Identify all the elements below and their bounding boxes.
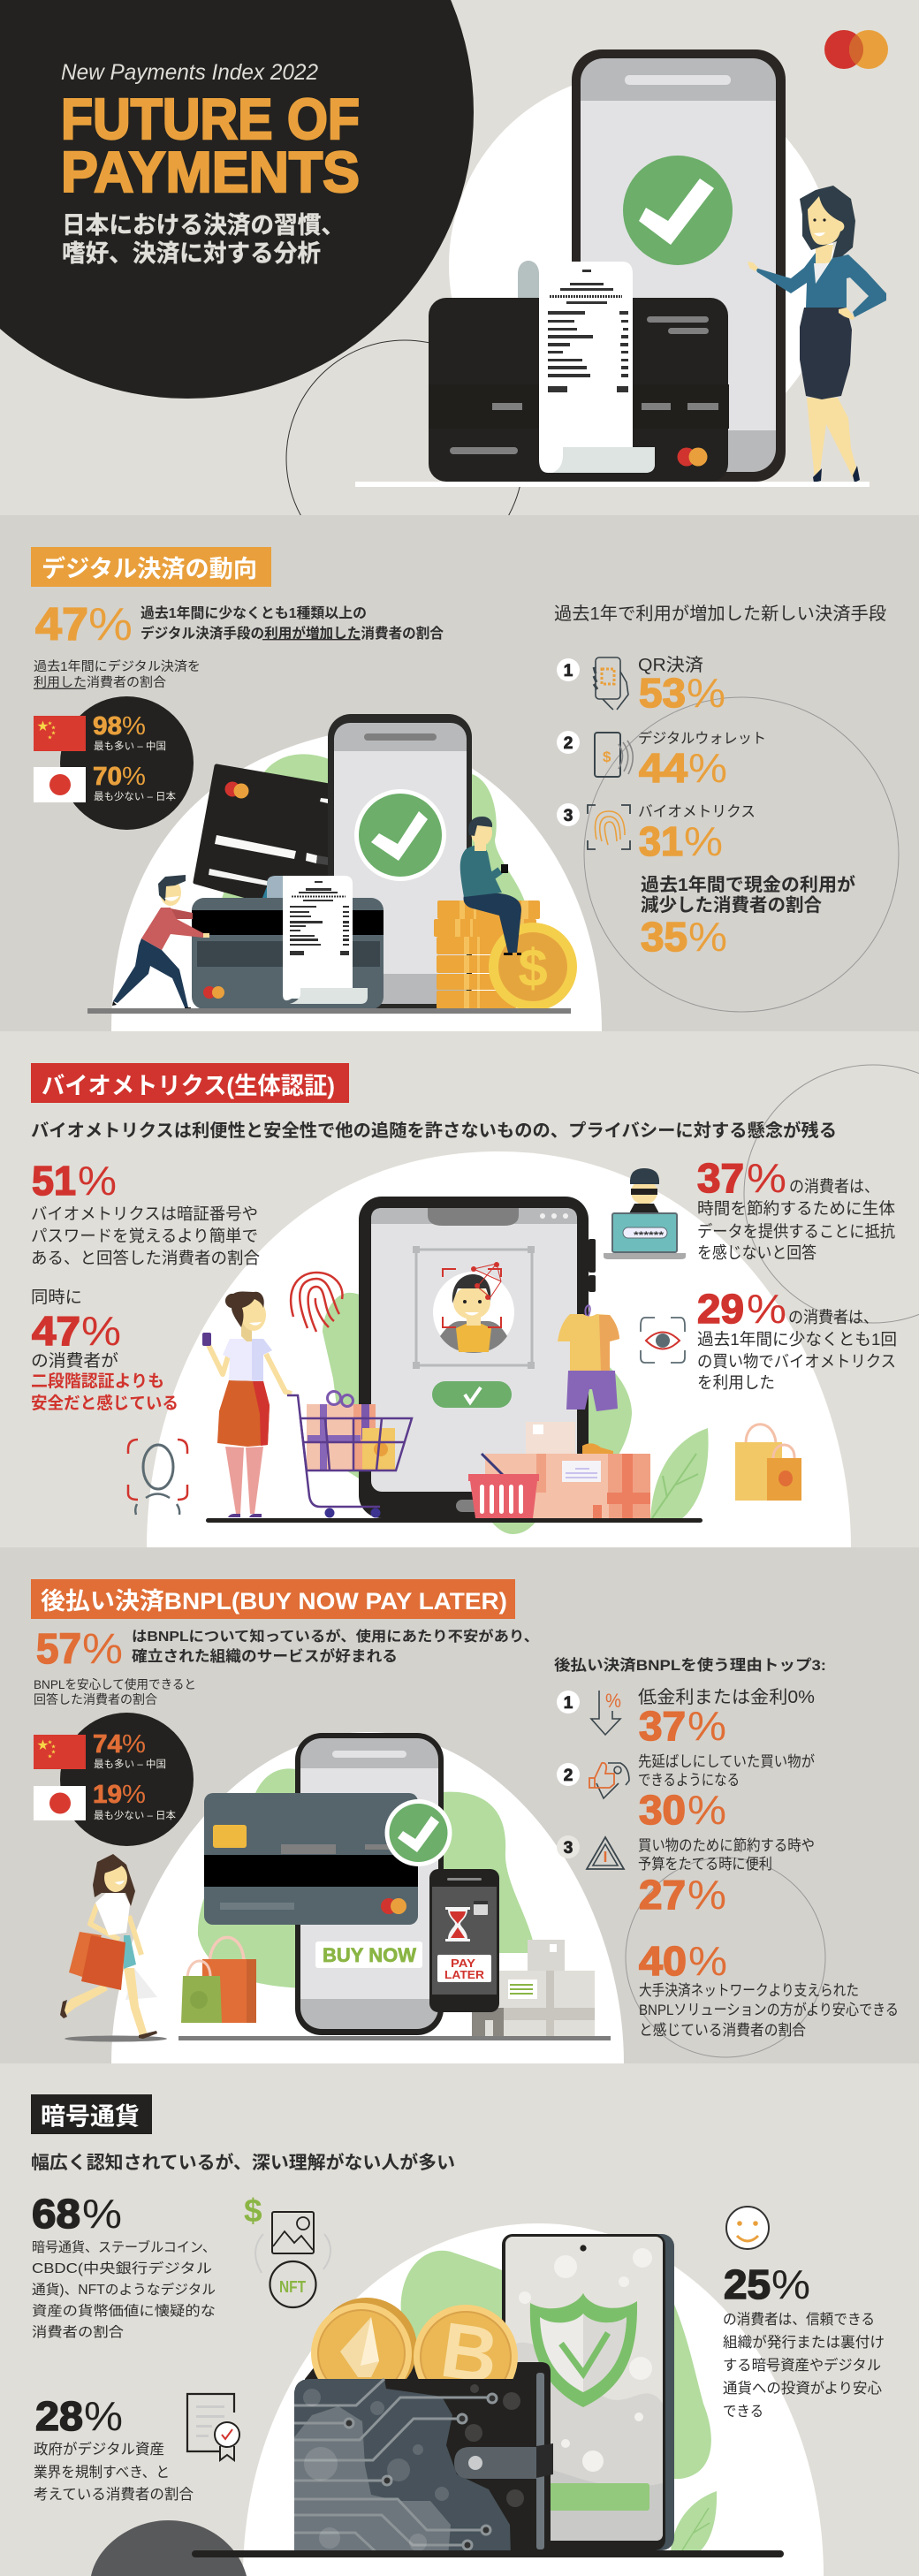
base bar [192, 2550, 784, 2557]
stat Japan 70%: 最も少ない – 日本 [94, 790, 176, 802]
base line [355, 482, 870, 487]
green blobs [221, 754, 526, 906]
stat 68% [32, 2191, 216, 2340]
crypto coins: B [436, 2306, 504, 2400]
woman walking with bags [60, 1854, 167, 2041]
icon: hourglass [445, 1907, 470, 1941]
stat China 98%: 98 [93, 712, 122, 741]
stat 57%: 57 [36, 1626, 81, 1673]
ranked item 1: QR: QR決済 [638, 655, 703, 675]
stat 37%: の消費者は、 [789, 1177, 879, 1196]
decorative ring [744, 1065, 919, 1323]
icon: fingerprint [588, 805, 630, 849]
China flag [34, 1735, 86, 1769]
stat 25%: 25 [724, 2261, 771, 2307]
China flag: ★ [37, 1738, 49, 1752]
icon: warning triangle [587, 1837, 624, 1869]
face id icon [128, 1440, 187, 1515]
stat 40%: % [688, 1938, 727, 1984]
stat 28% [34, 2393, 194, 2503]
cash decline stat: 減少した消費者の割合 [641, 894, 822, 916]
subtitle: New Payments Index 2022: New Payments Index 2022 [61, 60, 318, 85]
cash decline stat: 35 [641, 914, 687, 960]
right heading: 過去1年で利用が増加した新しい決済手段 [554, 604, 886, 624]
stat 28%: 考えている消費者の割合 [34, 2486, 194, 2503]
panel: crypto [31, 2094, 885, 2576]
China flag: ★ [48, 1754, 52, 1759]
man pushing printer [112, 875, 209, 1010]
heading label: 暗号通貨 [41, 2102, 140, 2130]
ranked item 3: biometrics [557, 803, 756, 864]
stat 47%: の消費者が [31, 1351, 118, 1371]
title: FUTURE OF PAYMENTS: PAYMENTS [61, 140, 360, 204]
panel: BNPL [31, 1579, 899, 2063]
ranked item 3: biometrics: % [684, 818, 723, 864]
reason 3: budgeting [557, 1835, 815, 1918]
stat 47%: 二段階認証よりも [31, 1372, 164, 1391]
reason 3: budgeting: 買い物のために節約する時や [638, 1837, 815, 1854]
stat 29%: の消費者は、 [788, 1308, 878, 1326]
left caption: 過去1年間にデジタル決済を [34, 658, 201, 674]
ranked item 2: wallet: 2 [564, 734, 573, 753]
phone with shield [502, 2234, 674, 2550]
subheading: バイオメトリクスは利便性と安全性で他の追随を許さないものの、プライバシーに対する懸念が残る [31, 1120, 837, 1141]
stat 40%: と感じている消費者の割合 [639, 2022, 806, 2039]
China flag: ★ [51, 1744, 56, 1750]
China flag [34, 716, 86, 751]
stat 37%: データを提供することに抵抗 [697, 1222, 895, 1241]
China flag: ★ [51, 1750, 56, 1755]
check badge [385, 1799, 452, 1866]
ranked item 2: wallet [557, 729, 766, 791]
stat 29%: % [747, 1286, 786, 1332]
decorative ring [626, 1858, 825, 2057]
stat 37% [697, 1155, 895, 1262]
stat China 98%: 最も多い – 中国 [94, 740, 166, 752]
dark corner blob [91, 2520, 247, 2576]
icon: certificate [187, 2394, 239, 2460]
stat 68%: 資産の貨幣価値に懐疑的な [32, 2303, 216, 2319]
China flag: ★ [51, 726, 56, 731]
stat 25% [723, 2261, 885, 2420]
heading label: 後払い決済BNPL(BUY NOW PAY LATER) [41, 1588, 507, 1615]
reason 1: low interest: 37 [639, 1703, 686, 1749]
ranked item 1: QR: 53 [639, 670, 686, 716]
woman with cart [202, 1292, 292, 1517]
China flag: ★ [48, 735, 52, 741]
stat 25%: 組織が発行または裏付け [723, 2334, 885, 2351]
ranked item 1: QR [557, 655, 725, 716]
Japan flag [34, 1786, 86, 1820]
large phone [572, 49, 786, 482]
icon: NFT: $ [244, 2192, 262, 2229]
Japanese headline [62, 212, 345, 267]
left caption [34, 1677, 196, 1706]
stat 29%: を利用した [697, 1373, 775, 1392]
credit card [204, 1793, 418, 1925]
reason 3: budgeting: 3 [564, 1839, 573, 1858]
confirm button [432, 1381, 512, 1408]
icon: digital wallet [595, 733, 633, 777]
stat 37%: を感じないと回答 [697, 1243, 816, 1262]
decorative ring [584, 697, 899, 1012]
white arch [147, 1151, 851, 1547]
icon: NFT [244, 2192, 330, 2307]
icon: smiley [726, 2207, 769, 2249]
stat 51% [31, 1158, 260, 1267]
big dollar coin [489, 923, 577, 1011]
leaf veins [652, 1454, 698, 1518]
stat Japan 19% [93, 1781, 176, 1821]
stat 28%: 業界を規制すべき、と [34, 2464, 170, 2481]
heading label [31, 1579, 515, 1619]
stat 25%: % [771, 2261, 810, 2307]
icon: NFT: NFT [279, 2278, 306, 2296]
reason 2: buy deferred items: 先延ばしにしていた買い物が [638, 1753, 815, 1770]
shopping bags [181, 1937, 256, 2023]
face portrait [433, 1262, 514, 1353]
subheading: 幅広く認知されているが、深い理解がない人が多い [31, 2152, 455, 2173]
PAY LATER tag [437, 1955, 491, 1982]
reason 1: low interest: 1 [564, 1694, 573, 1713]
stat 25%: する暗号資産やデジタル [723, 2356, 881, 2374]
receipt [518, 261, 655, 473]
BUY NOW button: BUY NOW [323, 1944, 416, 1966]
reason 2: buy deferred items: 30 [639, 1787, 686, 1833]
title: FUTURE OF PAYMENTS: FUTURE OF [61, 87, 360, 151]
stat 37%: % [747, 1155, 786, 1201]
white arch [243, 2223, 824, 2576]
crypto coins [311, 2298, 518, 2379]
parcels and basket [468, 1422, 650, 1518]
icon: percent down arrow: % [605, 1690, 621, 1712]
stat 25%: 通貨への投資がより安心 [723, 2380, 882, 2397]
panel: header [0, 0, 888, 515]
heading label: バイオメトリクス(生体認証) [42, 1073, 335, 1099]
fingerprint icon [291, 1273, 342, 1332]
stat 57%: % [82, 1626, 123, 1673]
reason 1: low interest [557, 1687, 815, 1749]
stat 68%: 68 [32, 2191, 80, 2237]
stat 47%: 47 [32, 1308, 80, 1354]
woman presenting [748, 186, 886, 483]
stat 47%: % [81, 1308, 121, 1354]
title: FUTURE OF PAYMENTS [61, 87, 360, 204]
icon: calendar [474, 1901, 488, 1915]
white backdrop circle [449, 72, 834, 458]
stat China 74%: 74 [93, 1730, 122, 1759]
icon: percent down arrow [591, 1690, 621, 1735]
ranked item 2: wallet: % [688, 745, 727, 791]
reason 2: buy deferred items: できるようになる [638, 1772, 740, 1789]
stat 40%: 大手決済ネットワークより支えられた [639, 1982, 859, 1999]
stat 47% [31, 1288, 178, 1413]
stat Japan 19%: 19 [93, 1781, 122, 1809]
stat 40% [639, 1938, 899, 2039]
shopping cart [287, 1391, 412, 1518]
stat 29%: 過去1年間に少なくとも1回 [697, 1330, 897, 1349]
stat 37%: 時間を節約するために生体 [697, 1199, 895, 1218]
stat 47%: % [88, 599, 133, 650]
ranked item 1: QR: % [687, 670, 725, 716]
reason 3: budgeting: 予算をたてる時に便利 [638, 1856, 772, 1873]
right heading: 後払い決済BNPLを使う理由トップ3: [554, 1656, 826, 1674]
stat 51%: ある、と回答した消費者の割合 [31, 1249, 260, 1267]
stat 28%: 政府がデジタル資産 [34, 2440, 164, 2458]
stat Japan 70%: 70 [93, 763, 122, 791]
stat 68%: % [82, 2191, 122, 2237]
white arch [111, 1732, 624, 2063]
stat 37%: 37 [697, 1155, 744, 1201]
stat Japan 70% [93, 763, 176, 802]
shopping bags [735, 1425, 801, 1501]
base bar [206, 1518, 703, 1523]
PAY LATER tag: LATER [444, 1968, 485, 1981]
Japanese headline: 日本における決済の習慣、 [62, 212, 345, 239]
stat 29%: の買い物でバイオメトリクス [697, 1352, 896, 1371]
China flag: ★ [37, 719, 49, 733]
heading label [31, 2094, 152, 2134]
stat 47% [35, 599, 444, 650]
cash decline stat [641, 874, 856, 960]
hanging clothes [558, 1305, 619, 1411]
reason 2: buy deferred items: % [687, 1787, 726, 1833]
stat 47%: 過去1年間に少なくとも1種類以上の [141, 604, 367, 621]
stat 47%: 同時に [31, 1288, 82, 1307]
stat 68%: 暗号通貨、ステーブルコイン、 [32, 2238, 216, 2255]
country stats blob [34, 696, 194, 830]
stat Japan 19%: 最も少ない – 日本 [94, 1809, 176, 1821]
small phone pay later [429, 1869, 499, 2012]
China flag: ★ [48, 1740, 52, 1745]
ranked item 2: wallet: 44 [639, 745, 687, 791]
ranked item 3: biometrics: 31 [639, 818, 683, 864]
printer [192, 898, 384, 1009]
stat 57%: 確立された組織のサービスが好まれる [132, 1647, 398, 1665]
stat 40%: 40 [639, 1938, 687, 1984]
reason 3: budgeting: 27 [639, 1872, 686, 1918]
stat 68%: 消費者の割合 [32, 2324, 125, 2340]
ranked item 3: biometrics: 3 [564, 807, 573, 825]
China flag: ★ [48, 721, 52, 726]
wallet back [300, 2362, 551, 2557]
Mastercard logo [824, 30, 888, 69]
China flag: ★ [51, 731, 56, 736]
reason 1: low interest: % [687, 1703, 726, 1749]
stat China 74% [93, 1730, 166, 1770]
leaf [671, 2491, 717, 2551]
reason 1: low interest: 低金利または金利0% [638, 1687, 815, 1707]
thin decorative ring [286, 339, 520, 515]
cash decline stat: 過去1年間で現金の利用が [641, 874, 856, 895]
icon: QR phone [594, 657, 628, 710]
green blob [198, 1768, 535, 1988]
phone with face scan [359, 1197, 596, 1518]
coin stack [434, 900, 540, 1009]
stat 29%: 29 [697, 1286, 744, 1332]
left caption: 回答した消費者の割合 [34, 1692, 157, 1706]
ranked item 2: wallet: デジタルウォレット [638, 729, 766, 747]
cash decline stat: % [688, 914, 727, 960]
stat 51%: バイオメトリクスは暗証番号や [31, 1204, 258, 1223]
stat Japan 19%: % [122, 1781, 146, 1809]
big dollar coin: $ [518, 938, 548, 998]
heading label: デジタル決済の動向 [42, 555, 257, 582]
ranked item 1: QR: 1 [564, 662, 573, 680]
credit card [195, 766, 334, 903]
stat China 74%: 最も多い – 中国 [94, 1758, 166, 1770]
stat 28%: 28 [35, 2393, 83, 2439]
thief at laptop [604, 1168, 686, 1259]
phone [295, 1733, 444, 2035]
base bar [87, 1008, 571, 1014]
man sitting on coins [460, 817, 521, 955]
reason 3: budgeting: % [687, 1872, 726, 1918]
stat China 98% [93, 712, 166, 752]
green blob [401, 2251, 711, 2479]
reason 2: buy deferred items: 2 [564, 1767, 573, 1785]
shield [530, 2293, 637, 2407]
phone [328, 714, 472, 1009]
left caption [34, 658, 201, 690]
stat 51%: % [78, 1158, 117, 1204]
base bar [178, 2036, 611, 2040]
stat 51%: パスワードを覚えるより簡単で [31, 1227, 258, 1245]
ranked item 3: biometrics: バイオメトリクス [638, 803, 756, 820]
icon: thumbs up with tag [589, 1763, 629, 1798]
country stats blob [34, 1713, 194, 1846]
stat 47%: 安全だと感じている [31, 1393, 178, 1413]
stat China 98%: % [122, 712, 146, 741]
panel: digital payments [31, 547, 899, 1031]
crypto wallet [294, 2373, 553, 2557]
stat 29% [697, 1286, 897, 1392]
left caption: 利用した消費者の割合 [34, 675, 167, 690]
panel: biometrics [31, 1063, 919, 1547]
stat 68%: CBDC(中央銀行デジタル [32, 2260, 212, 2276]
Japanese headline: 嗜好、決済に対する分析 [62, 240, 321, 267]
stat 28%: % [84, 2393, 123, 2439]
stat 25%: できる [723, 2403, 763, 2420]
reason 2: buy deferred items [557, 1753, 815, 1833]
stat 25%: の消費者は、信頼できる [723, 2311, 875, 2328]
stat China 74%: % [122, 1730, 146, 1759]
stat 47%: デジタル決済手段の利用が増加した消費者の割合 [141, 625, 444, 642]
black title circle [0, 0, 474, 399]
left caption: BNPLを安心して使用できると [34, 1677, 196, 1691]
heading label [31, 547, 271, 587]
stat 57%: はBNPLについて知っているが、使用にあたり不安があり、 [132, 1628, 539, 1645]
receipt printer [429, 298, 729, 482]
stat 51%: 51 [32, 1158, 76, 1204]
green blobs [323, 1293, 709, 1534]
parcels [472, 1940, 595, 2036]
receipt [262, 876, 368, 1004]
thief at laptop: ****** [634, 1230, 665, 1241]
eye icon [641, 1318, 685, 1363]
PAY LATER tag: PAY [451, 1957, 475, 1970]
white arch [111, 730, 602, 1031]
stat 57% [36, 1626, 539, 1673]
icon: digital wallet: $ [603, 748, 611, 765]
stat 47%: 47 [35, 599, 88, 650]
scan frame [416, 1250, 532, 1365]
heading label [31, 1063, 349, 1103]
stat 68%: 通貨)、NFTのようなデジタル [32, 2281, 216, 2298]
Japan flag [34, 767, 86, 802]
stat Japan 70%: % [122, 763, 146, 791]
